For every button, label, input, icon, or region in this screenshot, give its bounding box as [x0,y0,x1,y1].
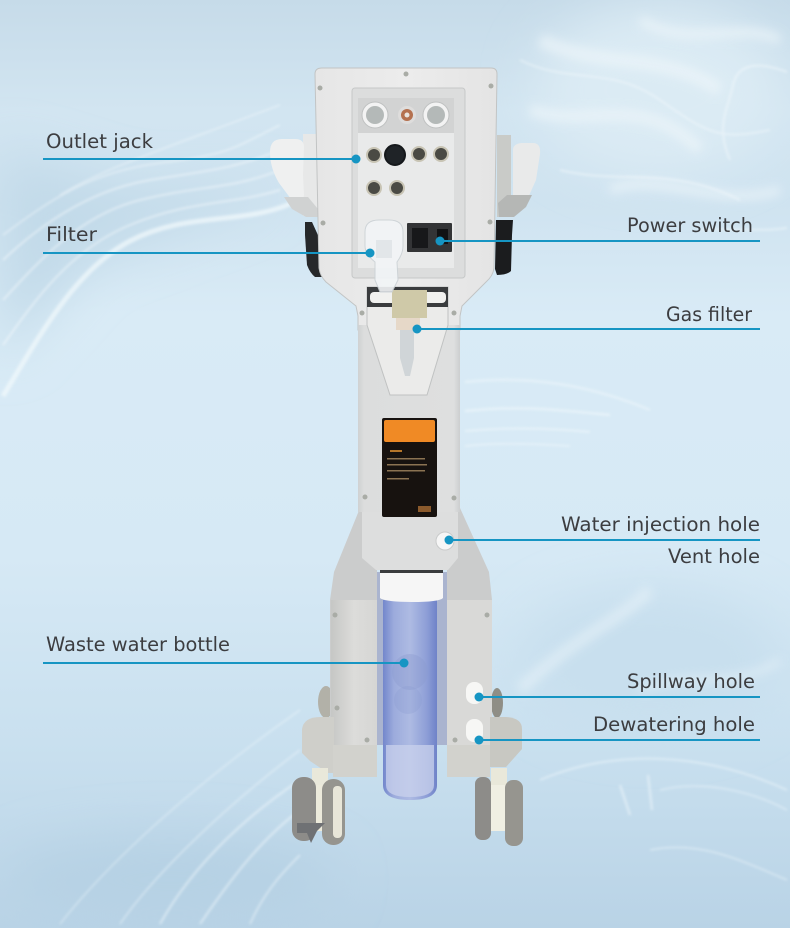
water injection port [436,532,454,550]
callout: dewatering hole [474,713,760,744]
callout: gas filter: Gas filter [666,303,753,326]
drain knobs [466,682,483,742]
callout: power switch [436,214,760,246]
neck [358,325,460,512]
callout: dewatering hole: Dewatering hole [593,713,755,736]
label: vent hole: Vent hole [668,545,760,568]
callout: filter [43,223,374,258]
callout: water injection hole [444,513,760,544]
mid right ripples [466,379,648,432]
warning label [382,418,437,517]
callout: water injection hole: Water injection hole [561,513,760,536]
caster bases [302,717,522,777]
left handpiece holder [270,134,322,277]
left swoosh [3,204,290,396]
callout: gas filter [412,303,760,334]
machine [270,68,540,846]
body screws [318,72,494,742]
gas filter window [367,287,448,395]
right caster wheel [475,768,523,846]
callout: spillway hole: Spillway hole [627,670,755,693]
bottom ripples [520,590,780,690]
callout: spillway hole [474,670,760,702]
rear wheels [318,686,503,718]
lower body [330,508,492,745]
right handpiece holder [495,135,540,275]
callout: outlet jack [43,130,360,164]
callout: power switch: Power switch [627,214,753,237]
gauge strip [358,98,454,133]
waste water bottle [380,570,443,800]
control inset [352,88,465,278]
callout: waste water bottle: Waste water bottle [46,633,230,656]
top right caustics [530,20,780,196]
outlet connectors [367,145,448,195]
filter bulb [365,220,403,292]
callout: waste water bottle [43,633,408,668]
left caster wheel [292,768,345,845]
power module [407,223,452,252]
head panel [315,68,497,330]
callout: outlet jack: Outlet jack [46,130,154,153]
callout: filter: Filter [46,223,98,246]
